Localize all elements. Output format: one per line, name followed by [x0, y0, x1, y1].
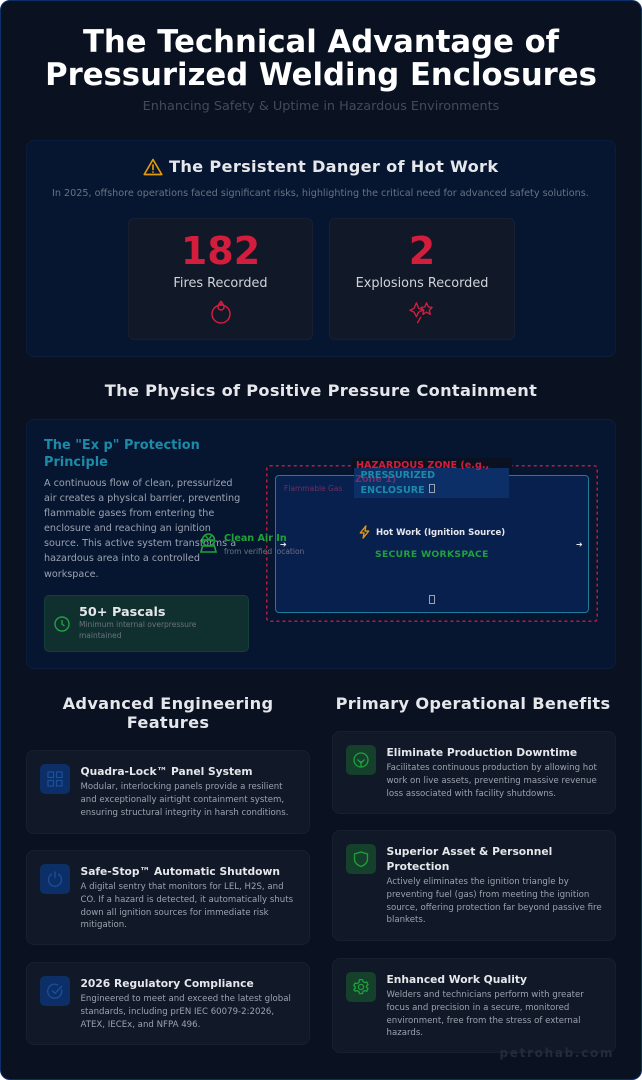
- number: 2: 2: [409, 229, 435, 273]
- description: hazards.: [386, 1028, 423, 1038]
- panel: physics: [26, 419, 616, 669]
- description: Minimum internal overpressure: [79, 620, 196, 629]
- title: 2026 Regulatory Compliance: [80, 976, 254, 990]
- glyph placeholder top: [429, 484, 434, 493]
- text: from verified location: from verified location: [224, 547, 304, 556]
- label background: enclosure: [354, 468, 509, 498]
- icon: clock: [54, 616, 70, 632]
- icon: grid: [40, 764, 70, 794]
- icon: leaf circle: [346, 745, 376, 775]
- description: Modular, interlocking panels provide a resilient: [80, 782, 283, 792]
- description: [80, 782, 288, 818]
- title: Enhanced Work Quality: [386, 972, 527, 986]
- text: hazardous zone: HAZARDOUS ZONE (e.g.,: [356, 460, 489, 471]
- card: quadra-lock: [26, 750, 310, 834]
- description: Engineered to meet and exceed the latest global: [80, 994, 291, 1004]
- heading: ex p principle: The "Ex p" Protection: [44, 438, 200, 452]
- heading: features: Features: [127, 713, 209, 732]
- description: ATEX, IECEx, and NFPA 496.: [80, 1020, 200, 1030]
- stat card: explosions: [329, 218, 515, 340]
- description: mitigation.: [80, 920, 127, 930]
- arrow: out: ➔: [576, 540, 583, 549]
- text: zone 1: Zone 1): [355, 474, 396, 485]
- heading: features: [62, 694, 273, 732]
- description: source, offering protection far beyond passive fire: [386, 903, 602, 913]
- number: 182: 182: [181, 229, 260, 273]
- description: [80, 882, 293, 930]
- title: Pressurized Welding Enclosures: [45, 58, 597, 93]
- enclosure: [275, 475, 589, 613]
- title: Eliminate Production Downtime: [386, 746, 577, 758]
- body text: flammable gases from entering the: [44, 508, 214, 519]
- description: preventing fuel (gas) from meeting the ignition: [386, 890, 589, 900]
- card: protection: [332, 830, 616, 941]
- label: hazardous zone: [352, 458, 512, 474]
- text: pressurized enclosure: [360, 470, 435, 496]
- diagram: enclosure: [200, 458, 598, 622]
- body text: hazardous area into a controlled: [44, 553, 200, 564]
- title: The Technical Advantage of: [83, 25, 559, 60]
- description: and exceptionally airtight containment system,: [80, 795, 284, 805]
- description: maintained: [79, 631, 122, 640]
- arrow: in: ➔: [280, 540, 287, 549]
- description: Facilitates continuous production by allowing hot: [386, 763, 597, 773]
- card: downtime: [332, 731, 616, 814]
- stat card: fires: [128, 218, 313, 340]
- title: Protection: [386, 860, 449, 872]
- icon: lightning: [360, 525, 370, 539]
- icon: gear: [346, 972, 376, 1002]
- body text: [44, 478, 240, 580]
- card: quality: [332, 958, 616, 1053]
- body text: source. This active system transforms a: [44, 538, 236, 549]
- icon: fire: [211, 300, 231, 324]
- title: Quadra-Lock™ Panel System: [80, 764, 252, 778]
- description: [386, 763, 597, 799]
- description: ensuring structural integrity in harsh conditions.: [80, 808, 288, 818]
- card: compliance: [26, 962, 310, 1045]
- description: work on live assets, preventing massive revenue: [386, 776, 597, 786]
- description: down all ignition sources for immediate risk: [80, 908, 269, 918]
- text: hot work: Hot Work (Ignition Source): [376, 528, 505, 538]
- label: explosions recorded: Explosions Recorded: [356, 276, 488, 290]
- icon: explosion sparks: [409, 302, 433, 324]
- text: clean air in: Clean Air In: [224, 533, 287, 544]
- text: pressurized enclosure: PRESSURIZED: [360, 470, 435, 481]
- body text: enclosure and reaching an ignition: [44, 523, 211, 534]
- icon: power: [40, 864, 70, 894]
- description: Actively eliminates the ignition triangle by: [386, 877, 569, 887]
- description: [386, 990, 584, 1038]
- panel: danger of hot work: [26, 140, 616, 357]
- description: blankets.: [386, 915, 426, 925]
- subtitle: Enhancing Safety & Uptime in Hazardous Environments: [143, 98, 499, 114]
- description: [79, 620, 196, 640]
- description: [386, 877, 602, 925]
- description: focus and precision in a secure, monitored: [386, 1003, 569, 1013]
- description: environment, free from the stress of external: [386, 1016, 580, 1026]
- description: loss associated with facility shutdowns.: [386, 789, 556, 799]
- body text: A continuous flow of clean, pressurized: [44, 478, 232, 489]
- heading: physics: The Physics of Positive Pressure Containment: [105, 381, 537, 400]
- body text: air creates a physical barrier, preventing: [44, 493, 240, 504]
- description: standards, including prEN IEC 60079-2:2026,: [80, 1007, 274, 1017]
- callout: 50+ pascals: [44, 595, 249, 652]
- title: Superior Asset & Personnel: [386, 845, 552, 858]
- heading: benefits: Primary Operational Benefits: [336, 694, 610, 712]
- description: Welders and technicians perform with greater: [386, 990, 584, 1000]
- icon: warning triangle: [143, 158, 163, 176]
- description: A digital sentry that monitors for LEL, H2S, and: [80, 882, 284, 892]
- title: [45, 25, 597, 93]
- description: [80, 994, 291, 1030]
- heading: ex p principle: [44, 438, 200, 470]
- text: pressurized enclosure: ENCLOSURE: [360, 485, 425, 496]
- title: Safe-Stop™ Automatic Shutdown: [80, 864, 280, 878]
- text: flammable gas: Flammable Gas: [284, 484, 342, 493]
- heading: danger: The Persistent Danger of Hot Work: [169, 157, 498, 176]
- title: [386, 845, 552, 872]
- icon: check: [40, 976, 70, 1006]
- value: 50+ Pascals: [79, 605, 166, 620]
- card: safe-stop: [26, 850, 310, 945]
- text: secure workspace: SECURE WORKSPACE: [375, 549, 489, 560]
- zone outline: hazardous: [266, 465, 598, 622]
- watermark: petrohab.com: [500, 1046, 614, 1060]
- heading: features: Advanced Engineering: [63, 694, 273, 712]
- intro text: In 2025, offshore operations faced significant risks, highlighting the critical need for advanced safety solutions.: [52, 188, 589, 199]
- label: fires recorded: Fires Recorded: [173, 276, 268, 290]
- icon: shield: [346, 844, 376, 874]
- heading: ex p principle: Principle: [44, 455, 108, 470]
- icon: clean air: [200, 533, 217, 553]
- body text: workspace.: [44, 569, 99, 580]
- description: CO. If a hazard is detected, it automatically shuts: [80, 895, 293, 905]
- glyph placeholder bottom: [429, 595, 434, 604]
